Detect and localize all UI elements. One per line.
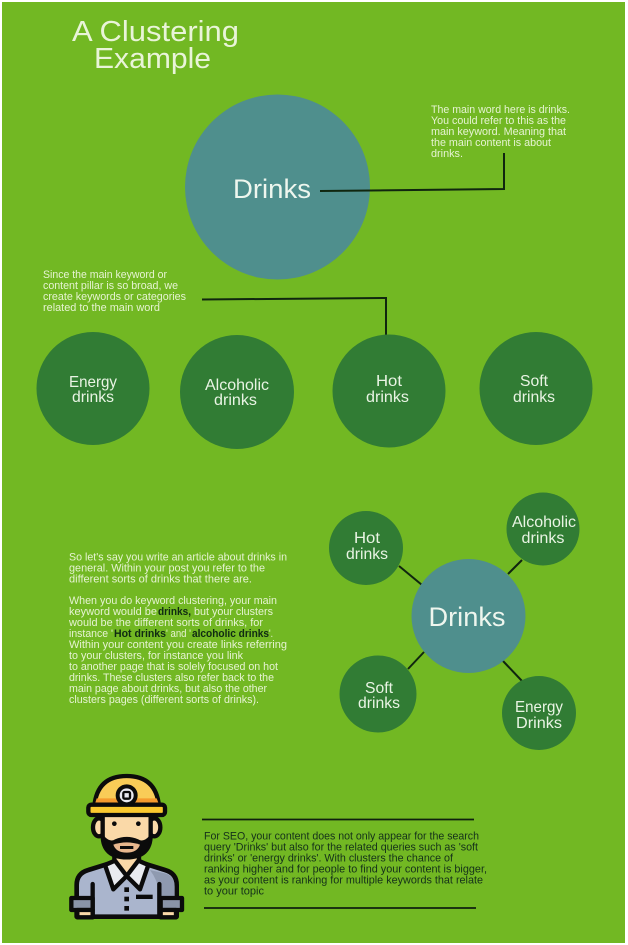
cluster circle: Hot drinks	[329, 511, 403, 585]
text block: article explanation: Hot drinks	[114, 628, 166, 640]
cluster circle: Soft drinks	[340, 656, 416, 732]
text block: main word explanation	[431, 104, 570, 160]
icon part: collar	[105, 861, 148, 889]
circle: Alcoholic drinks: Alcoholic	[205, 377, 269, 394]
icon part: neck	[114, 852, 139, 876]
circle: Energy drinks	[36, 332, 150, 445]
text block: article explanation: keyword would be	[69, 606, 157, 618]
text block: SEO summary: as your content is ranking for multiple keywords that relate	[204, 874, 483, 886]
icon part: helmet	[94, 776, 159, 806]
main circle: Drinks	[185, 94, 370, 280]
cluster circle: Alcoholic drinks: Alcoholic	[512, 514, 576, 531]
text block: article explanation: general. Within your post you refer to the	[69, 562, 265, 574]
text block: article explanation: but your clusters	[194, 606, 273, 618]
text block: categories explanation: create keywords or categories	[43, 291, 186, 303]
cluster circle: Hot drinks: Hot	[354, 530, 381, 547]
cluster centre circle: Drinks	[412, 559, 526, 673]
title: Example	[94, 43, 211, 75]
text block: article explanation	[68, 552, 287, 706]
text block: categories explanation	[43, 269, 186, 314]
cluster circle: Soft drinks: Soft	[365, 680, 394, 697]
cluster circle: Soft drinks: drinks	[358, 695, 400, 712]
text block: main word explanation: The main word here is drinks.	[431, 104, 570, 116]
icon part: body	[77, 862, 177, 917]
circle: Soft drinks: Soft	[520, 373, 549, 390]
diagram: cluster connector lines	[399, 560, 522, 681]
text block: SEO summary: drinks' or 'energy drinks'. With clusters the chance of	[204, 852, 454, 864]
circle: Alcoholic drinks	[180, 335, 294, 449]
text block: article explanation: drinks. These clusters also refer back to the	[69, 672, 274, 684]
cluster circle: Energy Drinks: Drinks	[516, 715, 562, 732]
icon part: ears	[93, 818, 105, 836]
cluster circle: Energy Drinks: Energy	[515, 699, 563, 716]
icon part: cuffs and hands	[71, 884, 182, 917]
text block: categories explanation: Since the main keyword or	[43, 269, 167, 281]
cluster circle: Hot drinks: drinks	[346, 546, 388, 563]
divider: bottom rule	[204, 907, 476, 909]
text block: SEO summary: ranking higher and for people to find your content is bigger,	[204, 864, 487, 876]
text block: main word explanation: You could refer to this as the	[431, 115, 566, 127]
text block: SEO summary	[204, 830, 487, 898]
circle: Energy drinks: drinks	[72, 389, 114, 406]
text block: article explanation: instance '	[69, 628, 113, 640]
circle: Soft drinks: drinks	[513, 389, 555, 406]
circle: Energy drinks: Energy	[69, 374, 117, 391]
circle: Soft drinks	[480, 332, 592, 445]
text block: article explanation: '.	[269, 628, 273, 640]
text block: article explanation: alcoholic drinks	[192, 628, 269, 640]
title: A Clustering	[72, 16, 239, 48]
text block: main word explanation: drinks.	[431, 148, 463, 160]
text block: article explanation: main page about drinks, but also the other	[69, 683, 267, 695]
text block: article explanation: When you do keyword clustering, your main	[69, 595, 277, 607]
text block: categories explanation: content pillar is so broad, we	[43, 280, 178, 292]
cluster circle: Energy Drinks	[502, 676, 576, 750]
cluster circle: Alcoholic drinks: drinks	[522, 530, 564, 547]
icon: miner with helmet	[71, 776, 182, 917]
text block: SEO summary: to your topic	[204, 886, 264, 898]
divider: top rule	[202, 818, 474, 820]
text block: categories explanation: related to the main word	[43, 302, 160, 314]
text block: main word explanation: the main content is about	[431, 137, 552, 149]
circle: Hot drinks: drinks	[366, 389, 409, 406]
text block: article explanation: drinks,	[158, 606, 191, 618]
icon part: helmet lamp	[118, 786, 136, 804]
text block: article explanation: So let's say you write an article about drinks in	[69, 552, 287, 564]
text block: article explanation: different sorts of drinks that there are.	[69, 574, 252, 586]
text block: article explanation: ' and '	[166, 628, 191, 640]
text block: article explanation: would be the different sorts of drinks, for	[68, 617, 263, 629]
cluster circle: Alcoholic drinks	[506, 492, 580, 566]
arrow: connector from categories text to Hot drinks	[202, 298, 386, 336]
text block: article explanation: to another page that is solely focused on hot	[69, 661, 279, 673]
arrow: connector from main circle to explanation	[320, 153, 504, 191]
text block: SEO summary: query 'Drinks' but also for the related queries such as 'soft	[204, 842, 479, 854]
text block: main word explanation: main keyword. Meaning that	[431, 126, 567, 138]
text block: SEO summary: For SEO, your content does not only appear for the search	[204, 830, 479, 842]
text block: article explanation: clusters pages (different sorts of drinks).	[69, 694, 259, 706]
icon part: face	[103, 813, 151, 857]
title	[72, 16, 239, 75]
text block: article explanation: Within your content you create links referring	[69, 639, 287, 651]
circle: Hot drinks	[332, 334, 446, 448]
cluster centre circle: Drinks: Drinks	[428, 602, 506, 632]
circle: Alcoholic drinks: drinks	[214, 392, 257, 409]
main circle: Drinks: Drinks	[233, 174, 311, 204]
icon part: beard	[104, 836, 149, 857]
circle: Hot drinks: Hot	[376, 373, 403, 390]
text block: article explanation: to your clusters, for instance you link	[69, 650, 243, 662]
icon part: shirt details	[124, 887, 153, 911]
